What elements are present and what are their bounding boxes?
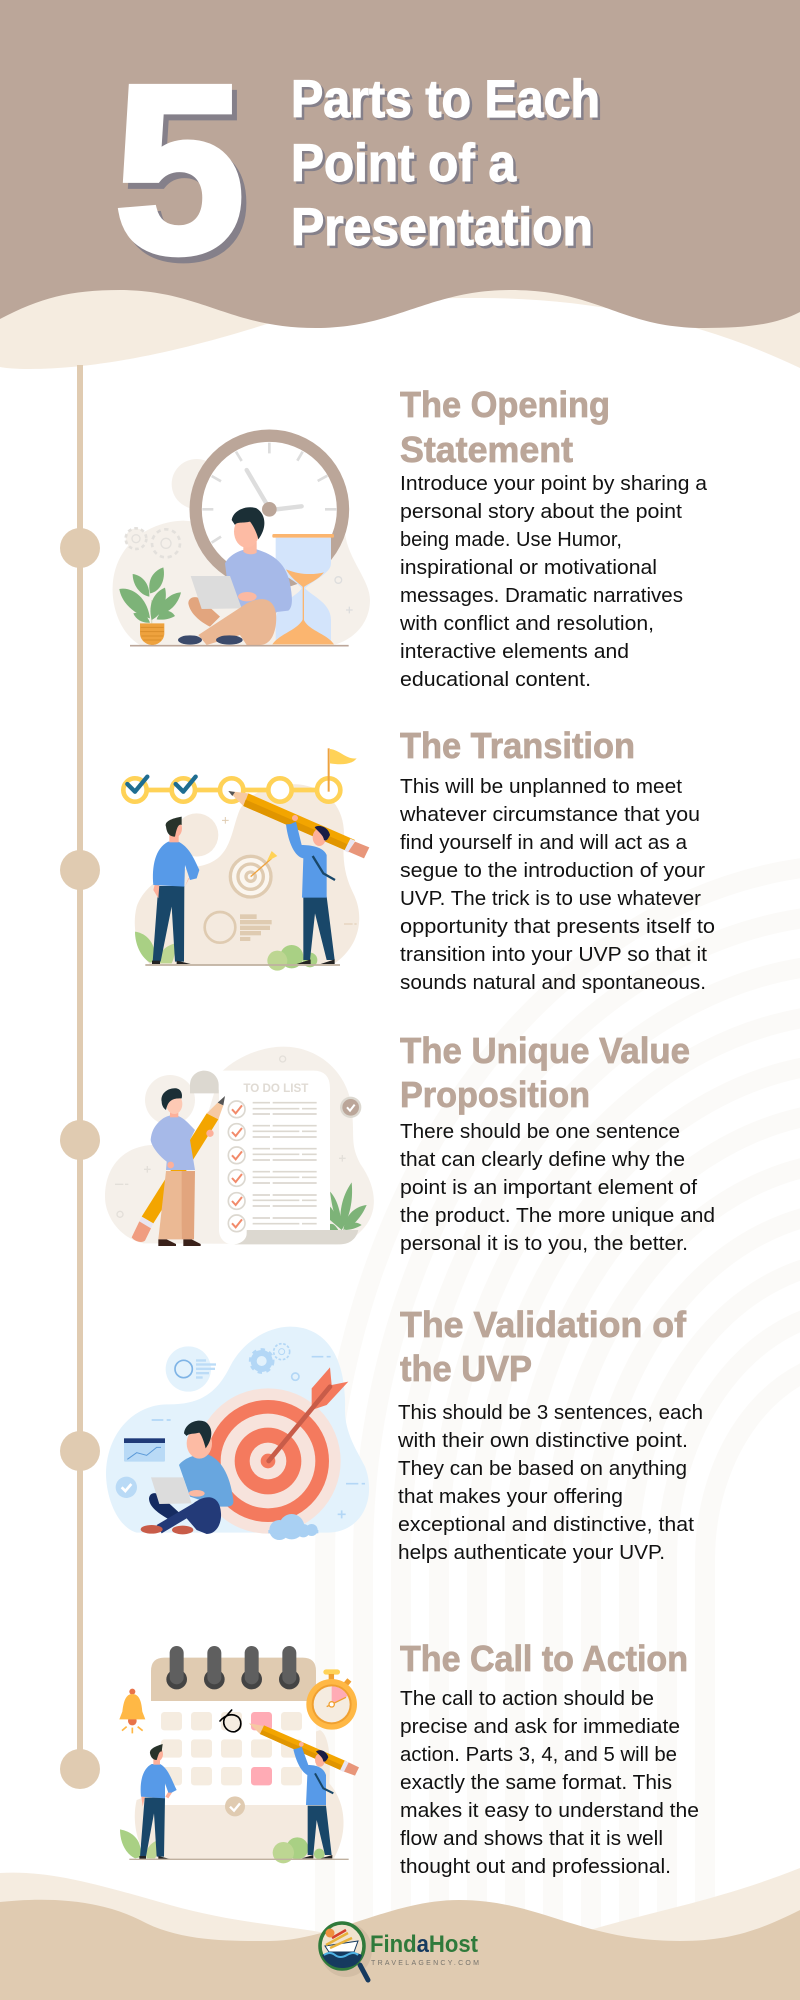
text block: step 2 body: sounds natural and spontaneous. [400, 972, 706, 994]
icon: large pencil [228, 791, 369, 858]
text block: step 5 body: precise and ask for immediate [400, 1716, 680, 1738]
icon: wall clock [196, 436, 343, 583]
icon: clouds [268, 1514, 318, 1540]
icon: ring chart [175, 1359, 216, 1379]
text block: step 3 body [400, 1121, 715, 1255]
text block: step 1 body: personal story about the point [400, 501, 682, 523]
text block: step 2 body: UVP. The trick is to use whatever [400, 888, 701, 910]
figure: person with pencil [151, 1088, 214, 1246]
figure: person with laptop [141, 1421, 233, 1534]
icon: potted plant [119, 567, 181, 645]
text block: step 4 body [397, 1402, 703, 1564]
figure: man standing left [152, 817, 199, 964]
title: Point of a [291, 134, 516, 193]
text block: step 5 body: The call to action should be [400, 1688, 654, 1710]
figure: man with raised arms [293, 1742, 333, 1858]
logo: FindaHost: TRAVELAGENCY.COM [371, 1960, 479, 1967]
icon: target [230, 851, 277, 897]
heading: The Transition: The Transition [400, 725, 635, 766]
icon: ring chart with bars [205, 912, 272, 943]
icon: checklist paper: TO DO LIST [243, 1081, 309, 1095]
title [291, 70, 602, 260]
icon: shrubs [120, 1829, 325, 1863]
big numeral 5: 5 [119, 41, 250, 309]
illustration: man with clock and hourglass [113, 436, 370, 646]
title: Parts to Each [294, 72, 602, 132]
title: Point of a [294, 136, 519, 196]
heading: The Unique Value Proposition [400, 1030, 690, 1115]
icon: calendar [151, 1646, 316, 1859]
icon: bell [119, 1689, 145, 1733]
figure: person with laptop [178, 507, 292, 645]
panel: step 4 text [397, 1304, 703, 1564]
illustration: to do list with pencil [105, 1047, 374, 1246]
icon: check badge [340, 1097, 361, 1118]
icon: pencil [249, 1723, 359, 1776]
icon: pencil [132, 1096, 225, 1242]
panel: step 2 text [399, 725, 715, 994]
logo: FindaHost: FindaHost [370, 1931, 478, 1958]
header wave background [0, 0, 800, 369]
heading: The Validation of the UVP: The Validation of [400, 1304, 687, 1345]
footer wave background [0, 1868, 800, 2000]
figure: man with raised arms [286, 815, 335, 964]
heading: The Unique Value Proposition: The Unique Value [400, 1030, 690, 1071]
text block: step 1 body [399, 473, 708, 691]
heading: The Opening Statement: The Opening [400, 384, 610, 425]
text block: step 4 body: They can be based on anything [398, 1458, 687, 1480]
text block: step 4 body: that makes your offering [398, 1486, 623, 1508]
illustration: two men with progress tracker and pencil [123, 748, 369, 971]
text block: step 5 body: action. Parts 3, 4, and 5 will be [400, 1744, 677, 1766]
text block: step 5 body [400, 1688, 699, 1878]
text block: step 1 body: being made. Use Humor, [400, 529, 622, 551]
text block: step 2 body: find yourself in and will act as a [400, 832, 688, 854]
title: Presentation [294, 200, 596, 260]
text block: step 2 body [399, 776, 715, 994]
text block: step 2 body: segue to the introduction of your [400, 860, 705, 882]
panel: step 3 text [400, 1030, 715, 1255]
text block: step 2 body: whatever circumstance that you [399, 804, 700, 826]
text block: step 4 body: This should be 3 sentences, each [398, 1402, 703, 1424]
text block: step 2 body: transition into your UVP so that it [400, 944, 707, 966]
icon: plant [330, 1182, 367, 1230]
logo: FindaHost [320, 1923, 479, 1980]
icon: gears [126, 528, 180, 557]
text block: step 5 body: exactly the same format. This [400, 1772, 672, 1794]
heading: The Opening Statement [400, 384, 610, 470]
text block: step 3 body: the product. The more unique and [400, 1205, 715, 1227]
text block: step 4 body: exceptional and distinctive, that [398, 1514, 694, 1536]
text block: step 3 body: personal it is to you, the better. [400, 1233, 688, 1255]
text block: step 4 body: helps authenticate your UVP. [398, 1542, 665, 1564]
icon: bullseye with arrow [195, 1367, 348, 1534]
icon: line chart card [124, 1438, 165, 1462]
text block: step 4 body: with their own distinctive point. [397, 1430, 688, 1452]
illustration: person and target [106, 1327, 369, 1540]
icon: checklist paper [190, 1071, 358, 1244]
text block: step 1 body: with conflict and resolution, [399, 613, 654, 635]
figure: man standing left [139, 1744, 177, 1859]
title: Presentation [291, 198, 593, 257]
icon: hourglass [272, 534, 334, 644]
panel: step 1 text [399, 384, 708, 691]
text block: step 1 body: inspirational or motivational [400, 557, 657, 579]
text block: step 1 body: educational content. [400, 669, 591, 691]
panel: step 5 text [400, 1638, 699, 1878]
big numeral 5: 5 [114, 35, 245, 303]
heading: The Call to Action: The Call to Action [400, 1638, 688, 1679]
title: Parts to Each [291, 70, 600, 129]
icon: stopwatch [306, 1669, 357, 1730]
timeline [60, 365, 100, 1789]
icon: check circle [116, 1477, 137, 1498]
text block: step 3 body: that can clearly define why the [400, 1149, 685, 1171]
text block: step 5 body: flow and shows that it is well [400, 1828, 663, 1850]
illustration: calendar with two men [119, 1646, 359, 1863]
text block: step 3 body: There should be one sentence [400, 1121, 680, 1143]
text block: step 1 body: messages. Dramatic narratives [400, 585, 683, 607]
icon: progress chain [123, 748, 357, 802]
icon: gears [250, 1344, 290, 1372]
text block: step 5 body: thought out and professional. [400, 1856, 671, 1878]
heading: The Validation of the UVP: the UVP [400, 1348, 532, 1389]
text block: step 3 body: point is an important element of [400, 1177, 697, 1199]
text block: step 2 body: This will be unplanned to meet [400, 776, 682, 798]
text block: step 2 body: opportunity that presents itself to [400, 916, 715, 938]
text block: step 5 body: makes it easy to understand the [400, 1800, 699, 1822]
heading: The Opening Statement: Statement [400, 429, 573, 470]
text block: step 1 body: Introduce your point by sharing a [400, 473, 708, 495]
heading: The Unique Value Proposition: Proposition [400, 1074, 590, 1115]
icon: shrubs [135, 932, 317, 971]
text block: step 1 body: interactive elements and [400, 641, 629, 663]
heading: The Validation of the UVP [400, 1304, 687, 1389]
